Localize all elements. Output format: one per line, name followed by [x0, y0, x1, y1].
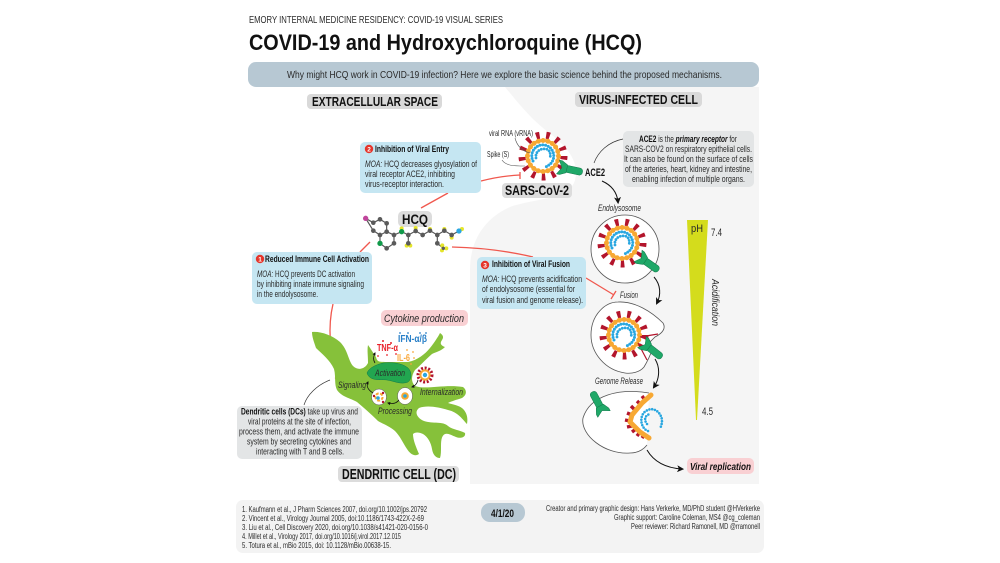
released viral RNA [641, 409, 662, 431]
arrow: to viral replication [647, 450, 682, 469]
virus annotations [487, 129, 533, 166]
callout: dendritic cells [237, 406, 362, 459]
card title: Inhibition of Viral Entry [375, 144, 449, 155]
cytokines: IL-6 [397, 352, 410, 364]
card body: viral receptor ACE2, inhibiting [365, 169, 455, 180]
references: 1. Kaufmann et al., J Pharm Sciences 2007, doi.org/10.1002/jps.20792 [242, 505, 427, 514]
badge 2: 2 [367, 146, 371, 154]
label: cytokine production [381, 310, 468, 326]
chart: pH gradient: 4.5 [702, 406, 713, 418]
card body: viral fusion and genome release). [482, 295, 583, 306]
badge 3: 3 [483, 262, 487, 270]
arrow: to genome release [654, 359, 659, 387]
card body: by inhibiting innate immune signaling [257, 279, 364, 290]
callout: ACE2: SARS-COV2 on respiratory epithelial cells. [625, 144, 752, 155]
label: fusion: Fusion [620, 290, 638, 300]
label: viral replication [687, 458, 754, 474]
cell with released genome [583, 389, 662, 453]
card body: MOA: HCQ prevents acidification [482, 274, 582, 285]
vesicle: processing [372, 389, 386, 405]
dendritic cell illustration [312, 332, 467, 458]
callout: ACE2: enabling infection of multiple organs. [632, 174, 745, 185]
date [481, 503, 525, 522]
callout: ACE2: of the arteries, heart, kidney and intestine, [625, 164, 752, 175]
label: cytokine production: Cytokine production [384, 313, 464, 325]
molecule: hydroxychloroquine [363, 216, 464, 252]
card body: virus-receptor interaction. [365, 179, 444, 190]
subtitle banner [248, 62, 759, 87]
callout leader to dendritic cell [304, 380, 330, 405]
footer panel [236, 500, 764, 553]
card body [257, 269, 364, 300]
nucleus: activation: Activation [374, 368, 405, 378]
credits: Graphic support: Caroline Coleman, MS4 @cg_coleman [614, 513, 760, 522]
pathway labels: Internalization [420, 387, 463, 398]
references: 3. Liu et al., Cell Discovery 2020, doi.org/10.1038/s41421-020-0156-0 [242, 523, 428, 532]
references: 4. Millet et al., Virology 2017, doi.org/10.1016/j.virol.2017.12.015 [242, 532, 401, 541]
cytokines: IFN-α/β [398, 333, 427, 345]
label: HCQ: HCQ [402, 211, 428, 227]
arrow: ACE2 to endolysosome [602, 181, 618, 202]
label: SARS-CoV-2: SARS-CoV-2 [505, 182, 569, 198]
label: ACE2: ACE2 [585, 167, 605, 179]
card body: in the endolysosome. [257, 289, 318, 300]
background panel: virus-infected cell [470, 87, 759, 484]
card title: Reduced Immune Cell Activation [265, 254, 369, 265]
pathway labels [338, 380, 463, 417]
chart: pH gradient [687, 220, 722, 420]
title: COVID-19 and Hydroxychloroquine (HCQ) [249, 30, 642, 55]
credits [546, 504, 760, 531]
label: endolysosome: Endolysosome [598, 203, 641, 213]
card: inhibition of viral entry [360, 142, 481, 193]
chart: pH gradient: Acidification [709, 278, 720, 326]
chart: pH gradient: 7.4 [711, 227, 722, 239]
pathway arrows [367, 353, 418, 404]
virus being internalized [418, 368, 432, 382]
callout: dendritic cells: system by secreting cytokines and [247, 436, 351, 448]
label: genome release: Genome Release [595, 376, 643, 386]
callout: ACE2: ACE2 is the primary receptor for [639, 134, 737, 145]
callout leader to ACE2 [594, 139, 623, 163]
credits: Creator and primary graphic design: Hans Verkerke, MD/PhD student @HVerkerke [546, 504, 760, 513]
pathway labels: Signaling [338, 380, 367, 391]
callout: dendritic cells: process them, and activate the immune [239, 426, 359, 438]
cytokines: TNF-α [377, 342, 398, 354]
callout: dendritic cells: interacting with T and B cells. [256, 446, 344, 458]
heading: virus-infected cell: VIRUS-INFECTED CELL [579, 92, 698, 107]
arrow: to fusion [654, 277, 660, 303]
card body: MOA: HCQ decreases glyosylation of [365, 159, 477, 170]
badge 1: 1 [258, 256, 262, 264]
references: 5. Totura et al., mBio 2015, doi: 10.1128/mBio.00638-15. [242, 541, 391, 550]
cytokines [377, 332, 427, 365]
card: inhibition of viral fusion [477, 257, 586, 309]
chart: pH gradient: pH [691, 223, 703, 235]
card body: of endolysosome (essential for [482, 284, 575, 295]
references: 2. Vincent et al., Virology Journal 2005, doi:10.1186/1743-422X-2-69 [242, 514, 424, 523]
subtitle banner: Why might HCQ work in COVID-19 infection? Here we explore the basic science behind the proposed mechanisms. [287, 69, 722, 81]
label: dendritic cell: DENDRITIC CELL (DC) [342, 467, 456, 483]
card: reduced immune cell activation [252, 252, 372, 304]
heading: extracellular space: EXTRACELLULAR SPACE [312, 94, 438, 109]
cell body [312, 332, 467, 458]
fusing endolysosome with virus [591, 302, 666, 373]
nucleus: activation [367, 363, 411, 383]
virus annotations: viral RNA (vRNA) [489, 129, 533, 138]
references [242, 505, 428, 550]
SARS-CoV-2 virus with ACE2 receptor [487, 129, 584, 179]
callout: ACE2: It can also be found on the surface of cells [624, 154, 753, 165]
inhibition lines from HCQ [330, 172, 616, 378]
card body [365, 159, 477, 190]
pathway labels: Processing [378, 406, 413, 417]
callout: ACE2 [623, 131, 754, 187]
label: viral replication: Viral replication [690, 461, 751, 473]
credits: Peer reviewer: Richard Ramonell, MD @rramonell [631, 522, 760, 531]
virus annotations: Spike (S) [487, 150, 509, 159]
vesicle: internalized virus [398, 388, 412, 404]
date: 4/1/20 [491, 508, 514, 520]
endolysosome with virus [591, 215, 662, 283]
card body [482, 274, 583, 306]
card title: Inhibition of Viral Fusion [492, 259, 570, 270]
card body: MOA: HCQ prevents DC activation [257, 269, 355, 280]
callout: dendritic cells: Dendritic cells (DCs) take up virus and [241, 406, 358, 418]
callout: dendritic cells: viral proteins at the site of infection, [248, 416, 351, 428]
series heading: EMORY INTERNAL MEDICINE RESIDENCY: COVID-19 VISUAL SERIES [249, 15, 503, 26]
